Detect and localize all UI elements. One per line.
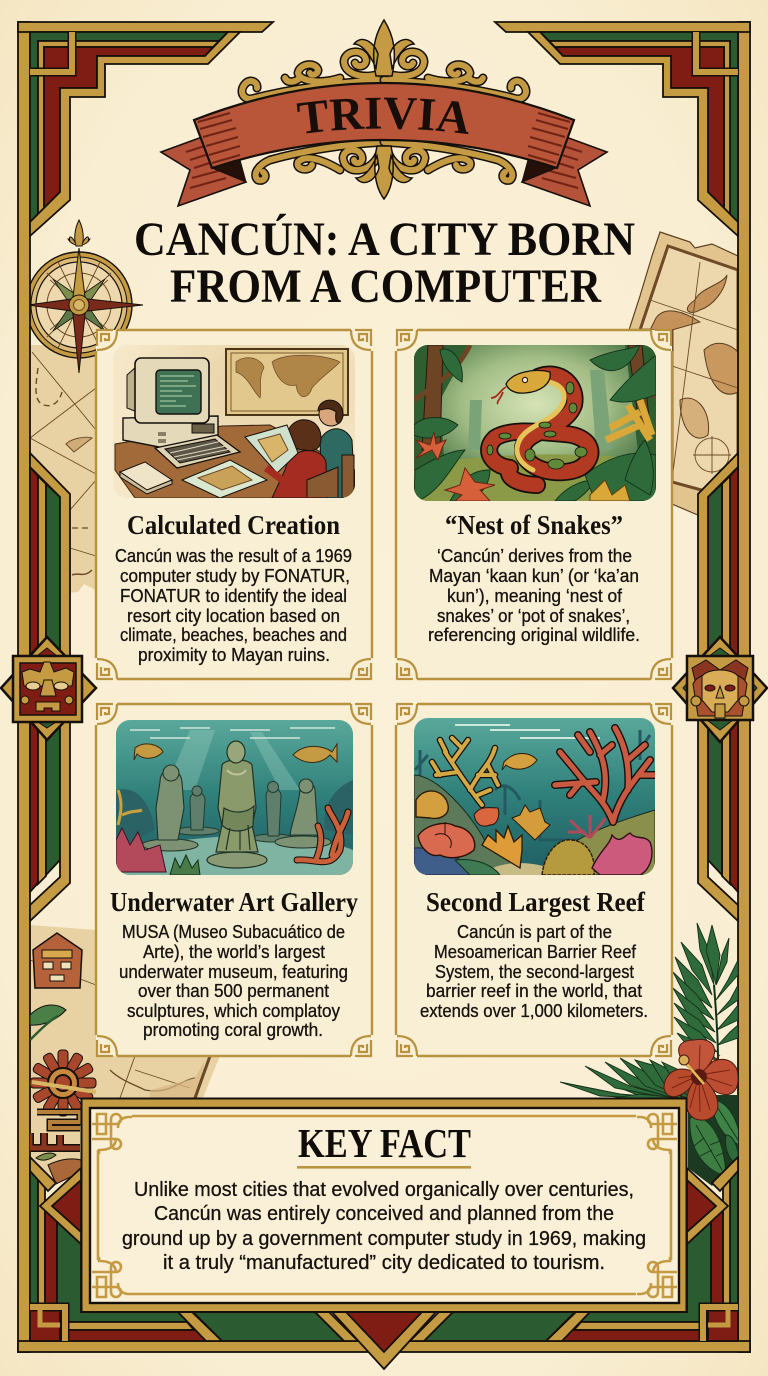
scrollwork: left half — [242, 52, 384, 180]
yellow blob coral — [416, 791, 448, 818]
body text — [420, 922, 648, 1021]
body text: sculptures, which complatoy — [127, 1001, 340, 1021]
key fact text: Unlike most cities that evolved organically over centuries, — [134, 1179, 634, 1201]
red coral — [555, 728, 655, 822]
hibiscus flower — [664, 1039, 738, 1120]
body text: System, the second-largest — [435, 962, 634, 982]
ribbon folds — [212, 160, 246, 182]
fish — [134, 744, 337, 762]
side statues — [142, 765, 331, 851]
body text: snakes’ or ‘pot of snakes’, — [437, 606, 630, 626]
map: left parchment — [30, 345, 96, 596]
medallion: left Maya mask — [1, 637, 96, 740]
body text: underwater museum, featuring — [119, 962, 348, 982]
frame corner: bottom left — [30, 1157, 358, 1341]
computer base — [123, 416, 218, 450]
heading: “Nest of Snakes” — [445, 510, 623, 540]
map held by woman — [245, 425, 298, 473]
title: FROM A COMPUTER — [170, 260, 602, 313]
body text: referencing original wildlife. — [428, 625, 640, 645]
books — [120, 462, 172, 490]
body text: extends over 1,000 kilometers. — [420, 1001, 648, 1021]
body text: kun’), meaning ‘nest of — [447, 586, 623, 606]
frame side band: left — [30, 453, 70, 921]
man in green jacket — [320, 429, 355, 498]
panel: Nest of Snakes — [396, 330, 672, 679]
frame bottom centre chevron — [332, 1312, 436, 1369]
orange fan coral — [482, 826, 522, 868]
pink coral — [592, 833, 652, 875]
chair — [307, 467, 338, 497]
body text: Cancún is part of the — [457, 922, 612, 942]
body text — [115, 546, 352, 665]
body text: computer study by FONATUR, — [120, 566, 350, 586]
panel: Second Largest Reef — [396, 704, 672, 1056]
small statues — [175, 782, 293, 842]
illustration: computer study scene — [113, 345, 355, 498]
body text: MUSA (Museo Subacuático de — [122, 922, 345, 942]
title — [134, 212, 635, 313]
rocks — [414, 774, 511, 875]
keyboard — [155, 435, 240, 468]
panel: Underwater Art Gallery — [96, 704, 372, 1056]
ribbon tail: left — [161, 137, 246, 206]
fleur-de-lis: top — [354, 20, 414, 76]
foliage: palm fronds and hibiscus — [30, 923, 740, 1186]
body text: climate, beaches, beaches and — [120, 625, 347, 645]
dome coral — [542, 840, 594, 875]
heading: key fact: KEY FACT — [298, 1120, 471, 1166]
ribbon tail: right — [522, 137, 607, 206]
fish — [502, 754, 537, 770]
woman in red jacket — [272, 450, 327, 498]
red-orange rose coral — [418, 823, 475, 858]
body text: Mesoamerican Barrier Reef — [434, 942, 637, 962]
palm frond: upper right — [673, 923, 738, 1060]
small orange coral — [474, 808, 499, 826]
panel: key fact — [82, 1098, 686, 1312]
palm frond: behind key fact — [560, 1058, 695, 1100]
medallion: right Maya mask — [673, 637, 767, 742]
scrollwork: right half — [384, 52, 526, 180]
monitor — [126, 368, 134, 412]
body text: promoting coral growth. — [143, 1020, 323, 1040]
body text: barrier reef in the world, that — [426, 981, 642, 1001]
key fact text: ground up by a government computer study in 1969, making — [122, 1228, 646, 1250]
illustration: jungle snake — [414, 345, 656, 501]
map: upper right parchment — [629, 232, 738, 530]
yellow fan coral — [512, 805, 550, 840]
map: lower left parchment — [30, 925, 220, 1185]
title: CANCÚN: A CITY BORN — [134, 212, 635, 266]
fleur-de-lis: bottom — [356, 146, 412, 199]
body text: Arte), the world’s largest — [143, 942, 325, 962]
purple branching coral — [568, 815, 605, 838]
snake head — [506, 370, 550, 393]
corals — [116, 828, 166, 872]
frame corner: top right — [495, 22, 750, 236]
gold coral — [432, 738, 498, 805]
heading: Second Largest Reef — [426, 887, 646, 917]
ribbon body — [194, 83, 574, 168]
illustration: coral reef — [414, 718, 655, 875]
banner: TRIVIA ribbon with scrollwork — [159, 18, 609, 208]
panel: Calculated Creation — [96, 330, 372, 679]
heading: Underwater Art Gallery — [110, 887, 358, 917]
body text — [428, 546, 640, 645]
frame corner: top left — [18, 22, 273, 236]
Maya decor: carved mask, flower, glyphs — [30, 933, 96, 1184]
body text — [119, 922, 348, 1040]
snake body — [489, 375, 590, 485]
key fact text: it a truly “manufactured” city dedicated to tourism. — [163, 1252, 605, 1274]
frame side band: right — [698, 453, 738, 921]
body text: Cancún was the result of a 1969 — [115, 546, 352, 566]
desk map — [182, 460, 267, 498]
heading: Calculated Creation — [127, 510, 340, 540]
icon: compass rose — [26, 220, 143, 373]
body text: over than 500 permanent — [138, 981, 329, 1001]
leaves below hibiscus — [688, 1095, 740, 1186]
frame corner: bottom right — [410, 1157, 738, 1341]
central statue — [207, 741, 267, 868]
body text: FONATUR to identify the ideal — [120, 586, 347, 606]
key fact text: Cancún was entirely conceived and planned from the — [154, 1203, 614, 1225]
body text: resort city location based on — [127, 606, 340, 626]
body text: Mayan ‘kaan kun’ (or ‘ka’an — [429, 566, 639, 586]
banner text: TRIVIA — [296, 98, 468, 134]
key fact text — [122, 1179, 646, 1274]
body text: ‘Cancún’ derives from the — [437, 546, 632, 566]
illustration: underwater statues — [116, 720, 353, 875]
body text: proximity to Mayan ruins. — [138, 645, 330, 665]
